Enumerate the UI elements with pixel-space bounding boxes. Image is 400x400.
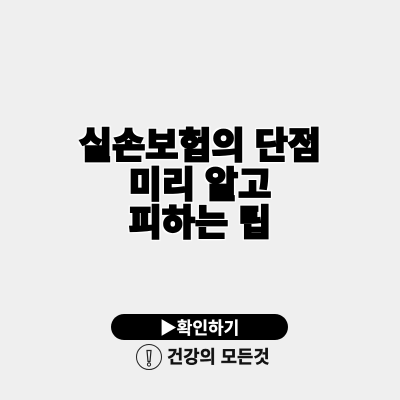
title: 실손보험의 단점 [79,117,321,169]
button: 확인하기 [111,314,288,340]
title [78,117,321,246]
title: 미리 알고 [129,156,271,208]
button: 확인하기: ▶확인하기 [160,314,239,339]
icon: exclamation circle [136,344,162,370]
brand name: 건강의 모든것 [167,343,270,369]
title: 피하는 팁 [129,194,271,246]
